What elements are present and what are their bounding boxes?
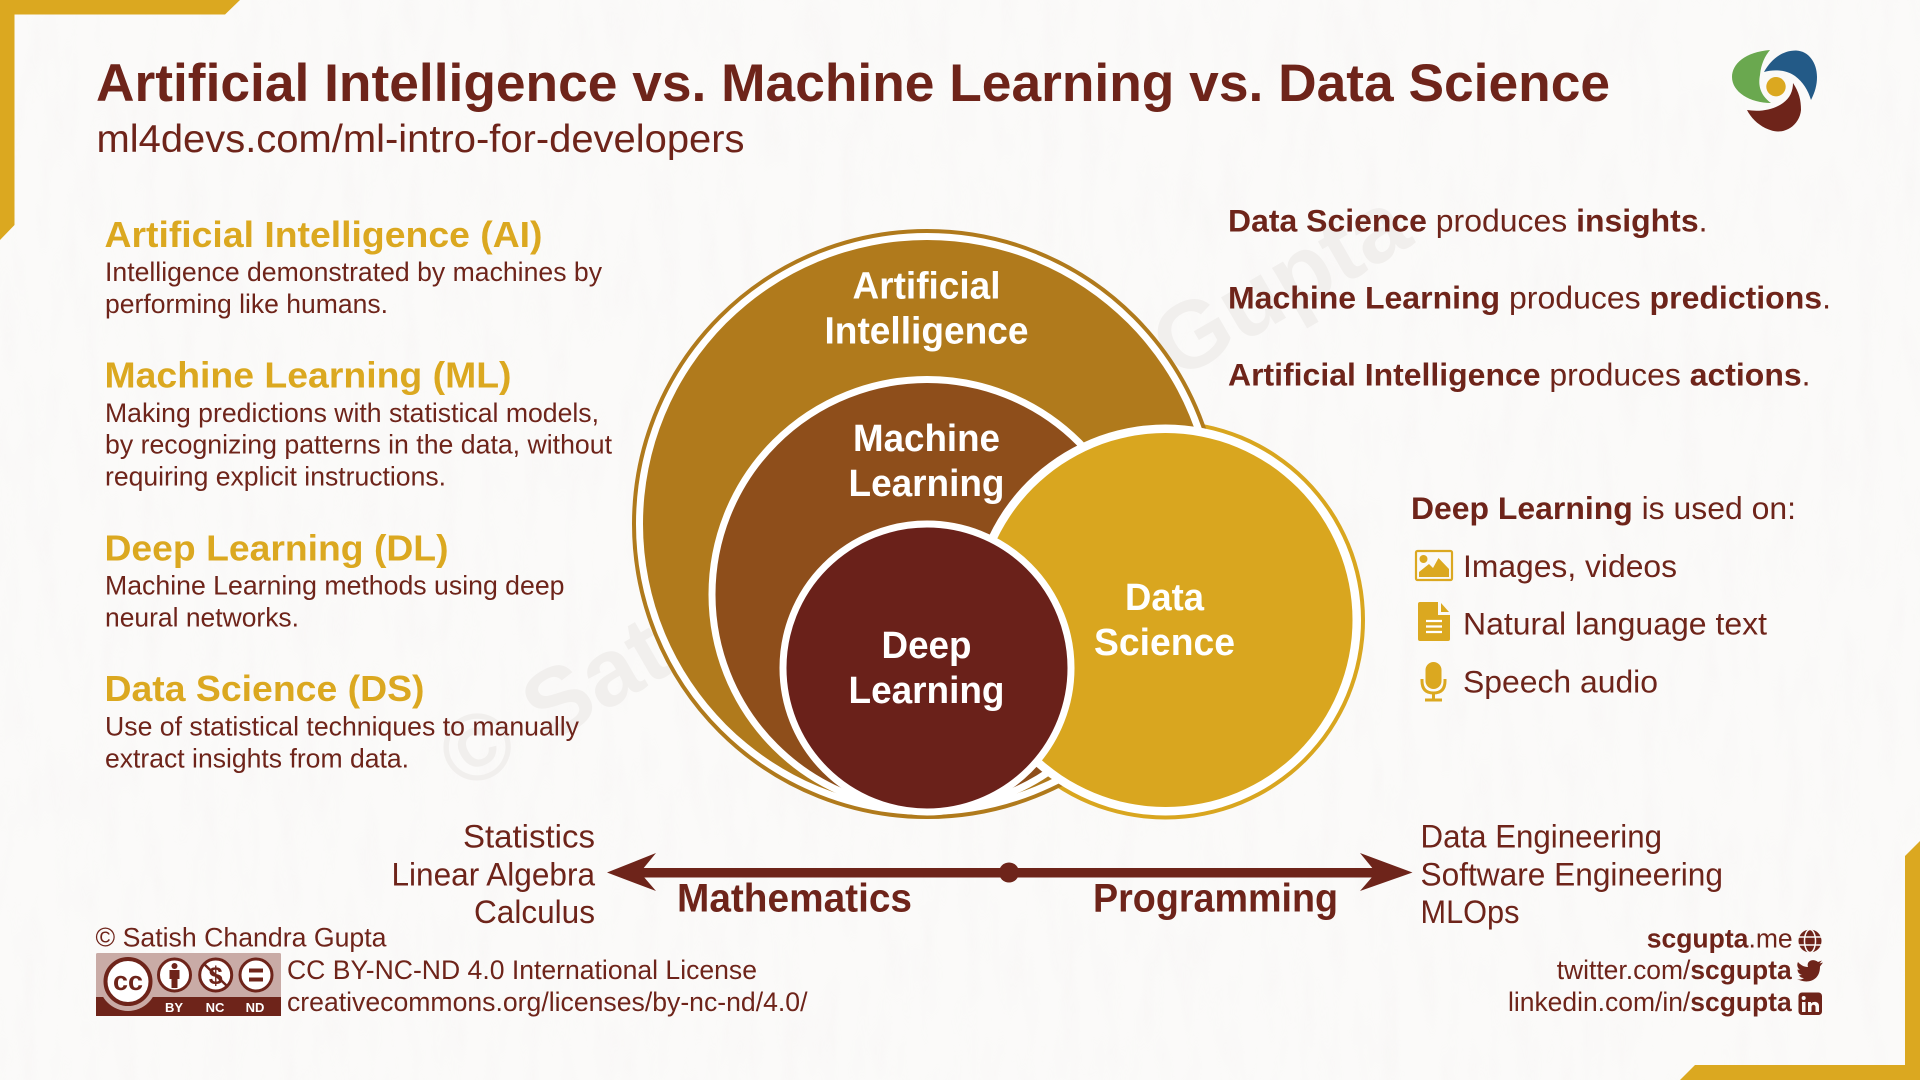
programming skills: Software Engineering <box>1420 856 1723 892</box>
watermark: © Satish Chandra Gupta <box>420 169 1427 811</box>
icon: image <box>1416 551 1452 580</box>
panel: what each field produces <box>1228 202 1831 392</box>
circle: deep learning <box>783 524 1071 812</box>
programming skills: Data Engineering <box>1420 818 1662 854</box>
definition: artificial intelligence: Intelligence demonstrated by machines by <box>105 257 603 287</box>
label: artificial intelligence: Intelligence <box>824 310 1028 352</box>
panel: what each field produces: Artificial Intelligence produces actions. <box>1228 356 1810 392</box>
contact links <box>1508 924 1823 1017</box>
license badge: ND <box>246 1000 264 1015</box>
label: programming: Programming <box>1093 876 1338 920</box>
programming skills <box>1420 818 1723 930</box>
icon: linkedin <box>1798 992 1822 1015</box>
definition: data science <box>104 668 580 774</box>
item: natural language text: Natural language text <box>1463 606 1767 642</box>
frame corner: bottom right <box>1680 841 1920 1080</box>
license text: creativecommons.org/licenses/by-nc-nd/4.0/ <box>287 987 808 1017</box>
label: machine learning: Learning <box>848 463 1004 505</box>
linkedin handle: linkedin.com/in/scgupta <box>1508 987 1793 1017</box>
logo <box>1732 50 1817 132</box>
definition: deep learning: Machine Learning methods using deep <box>105 570 564 600</box>
definition: deep learning: Deep Learning (DL) <box>104 528 448 568</box>
item: images, videos: Images, videos <box>1463 548 1677 584</box>
panel: definitions <box>104 214 613 774</box>
label: data science: Data <box>1125 577 1205 619</box>
license text <box>287 955 808 1017</box>
license badge: BY <box>165 1000 183 1015</box>
label: machine learning: Machine <box>853 418 1000 460</box>
label: deep learning: Deep <box>882 625 972 667</box>
label: data science: Science <box>1094 622 1235 664</box>
label: machine learning <box>848 418 1004 505</box>
icon: twitter <box>1797 960 1823 981</box>
license badge: cc <box>113 966 143 996</box>
twitter handle: twitter.com/scgupta <box>1557 955 1793 985</box>
label: artificial intelligence: Artificial <box>852 266 1000 308</box>
website: scgupta.me <box>1647 924 1793 954</box>
definition: data science: Use of statistical techniques to manually <box>105 712 580 742</box>
circle: data science <box>970 424 1361 816</box>
venn diagram <box>634 231 1365 820</box>
definition: machine learning: Machine Learning (ML) <box>104 354 512 396</box>
definition: data science: extract insights from data. <box>105 744 409 774</box>
title: Artificial Intelligence vs. Machine Learning vs. Data Science <box>96 54 1610 113</box>
definition: artificial intelligence: Artificial Intelligence (AI) <box>104 214 542 255</box>
license badge: NC <box>206 1000 225 1015</box>
mathematics skills: Calculus <box>474 894 595 930</box>
panel: what each field produces: Machine Learning produces predictions. <box>1228 280 1831 316</box>
label: mathematics: Mathematics <box>677 876 912 920</box>
copyright: © Satish Chandra Gupta <box>96 922 387 952</box>
mathematics skills: Statistics <box>463 818 595 854</box>
label: artificial intelligence <box>824 266 1028 352</box>
icon: document <box>1418 602 1450 641</box>
circle: machine learning <box>712 380 1142 810</box>
label: data science <box>1094 577 1235 664</box>
definition: deep learning <box>104 528 564 632</box>
definition: machine learning: requiring explicit instructions. <box>105 462 446 492</box>
circle: artificial intelligence <box>634 231 1220 817</box>
item: speech audio: Speech audio <box>1463 664 1658 700</box>
heading: Deep Learning is used on: <box>1411 490 1796 526</box>
definition: machine learning <box>104 354 613 492</box>
license badge: $ <box>209 962 223 990</box>
panel: what each field produces: Data Science produces insights. <box>1228 202 1708 238</box>
icon: globe <box>1798 930 1822 952</box>
definition: deep learning: neural networks. <box>105 602 299 632</box>
subtitle: ml4devs.com/ml-intro-for-developers <box>96 118 744 161</box>
icon: microphone <box>1422 662 1445 700</box>
definition: data science: Data Science (DS) <box>104 668 424 709</box>
double arrow: mathematics to programming <box>607 853 1412 891</box>
definition: artificial intelligence <box>104 214 603 319</box>
frame corner: top left <box>0 0 240 240</box>
panel: deep learning uses <box>1411 490 1796 700</box>
label: deep learning: Learning <box>848 670 1004 712</box>
definition: machine learning: by recognizing patterns in the data, without <box>105 430 613 460</box>
mathematics skills: Linear Algebra <box>392 856 595 892</box>
license badge <box>96 953 281 1016</box>
programming skills: MLOps <box>1420 894 1520 930</box>
definition: machine learning: Making predictions with statistical models, <box>105 398 599 428</box>
mathematics skills <box>392 818 595 930</box>
label: deep learning <box>848 625 1004 712</box>
definition: artificial intelligence: performing like humans. <box>105 289 388 319</box>
license text: CC BY-NC-ND 4.0 International License <box>287 955 757 985</box>
